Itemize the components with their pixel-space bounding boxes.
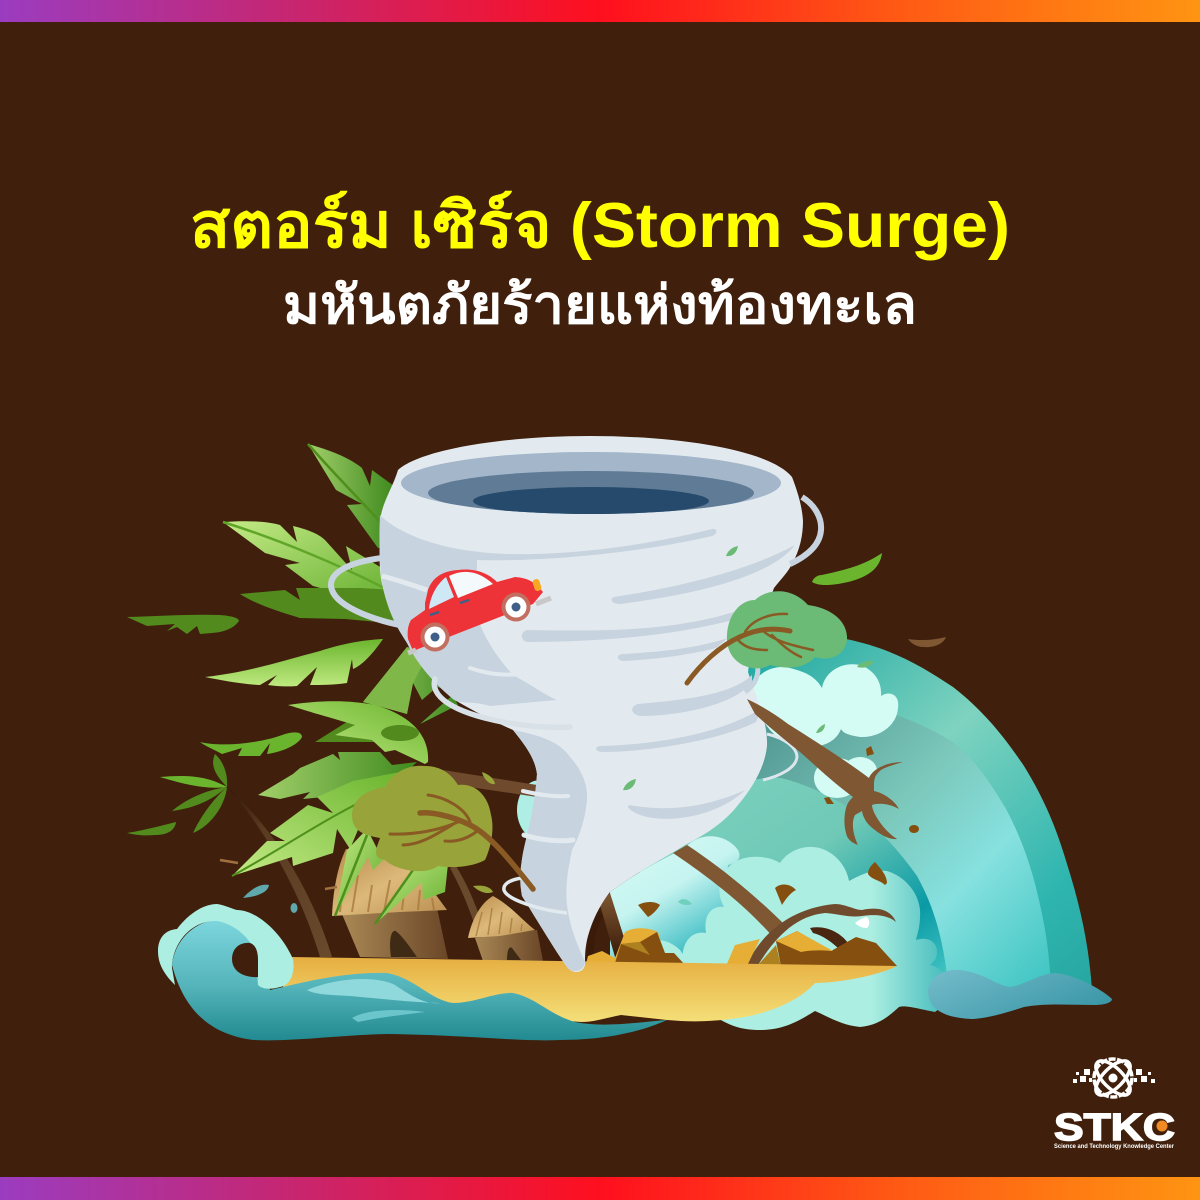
car door handles — [430, 600, 469, 615]
wave highlight lower — [352, 1010, 425, 1022]
olive tree branches — [390, 795, 533, 889]
palm trunk: left — [227, 787, 332, 957]
tree trunk: over lower wave — [673, 845, 787, 937]
ring: left — [331, 558, 410, 627]
ring: mid left — [434, 679, 570, 727]
front wave — [158, 904, 667, 1040]
car — [408, 570, 551, 653]
olive tree branch behind tornado — [443, 770, 537, 797]
ring: lower — [504, 878, 567, 913]
body shadow lower twist — [513, 730, 587, 971]
wave sea body — [172, 920, 667, 1040]
top gradient bar — [0, 0, 1200, 22]
wave foam: rocks backing puff — [640, 940, 690, 965]
sand beach — [280, 957, 897, 1022]
leaf: top — [308, 444, 394, 548]
light stripe on shadow — [382, 576, 427, 590]
tree trunk: near tornado base — [587, 893, 627, 957]
debris chips and small leaves — [473, 546, 919, 928]
body shadow upper left — [379, 515, 716, 706]
wave curl opening — [232, 943, 258, 977]
tornado inner rim — [401, 452, 781, 514]
leaf: far left — [127, 615, 239, 634]
leaf: mid gradient — [258, 752, 417, 799]
ring: upper right — [790, 497, 821, 564]
leaf: dark mid — [240, 588, 400, 624]
wave highlight — [307, 979, 440, 1003]
light stripes on lower twist — [523, 791, 573, 841]
car windows — [429, 577, 454, 609]
tornado — [379, 436, 803, 972]
leaf: long bright — [205, 639, 383, 686]
wave foam: teal patch behind tornado — [517, 780, 563, 840]
title: Storm Surge: สตอร์ม เซิร์จ (Storm Surge) — [190, 190, 1010, 261]
light stripe on shadow 2 — [470, 668, 520, 675]
right swell blob — [928, 970, 1112, 1019]
wave foam: upper cloud — [752, 664, 898, 747]
flying debris brown — [908, 637, 946, 647]
small palm fronds — [127, 754, 227, 835]
green tree crown — [687, 591, 847, 683]
bottom gradient bar — [0, 1177, 1200, 1200]
logo atom core — [1108, 1074, 1118, 1082]
rocks on the beach — [585, 928, 897, 968]
leaf: right of centre under tornado — [363, 647, 425, 714]
logo: STKC — [1054, 1055, 1175, 1150]
olive tree crown — [352, 766, 533, 889]
logo atom emblem — [1090, 1055, 1136, 1101]
logo orange dot — [1156, 1120, 1168, 1132]
leaf: upper left — [223, 521, 400, 610]
hut: large — [332, 849, 448, 959]
curved palm twigs and water drops — [220, 860, 337, 913]
palm leaves over large hut — [335, 829, 448, 924]
broken tree with roots on wave — [747, 699, 903, 845]
leaf: large low — [232, 772, 400, 876]
logo left pixels — [1073, 1069, 1092, 1083]
wave foam: lower cloud — [682, 847, 951, 1030]
hut: small — [468, 896, 543, 961]
tornado body — [380, 436, 803, 972]
curved fallen branches — [747, 904, 896, 965]
car wheels — [420, 622, 450, 652]
leaf: centre behind car — [363, 647, 458, 724]
wave curl foam — [158, 904, 294, 989]
logo right pixels — [1134, 1069, 1155, 1083]
tornado throat — [428, 471, 754, 515]
palm trunk: centre — [450, 866, 486, 935]
logo wordmark: STKC — [1054, 1107, 1175, 1149]
ring: streak to crown — [745, 662, 758, 692]
logo tagline: Science and Technology Knowledge Center — [1054, 1144, 1175, 1150]
wave foam: small puff — [814, 757, 877, 798]
flying leaf — [812, 553, 882, 585]
palm leaves, back group — [127, 444, 458, 876]
illustration: giant wave behind tornado — [640, 638, 1092, 1000]
car bumpers — [536, 598, 551, 604]
green tree branches — [687, 614, 813, 683]
leaf: curled — [288, 701, 428, 764]
leaf: small bright — [200, 732, 302, 756]
subtitle: มหันตภัยร้ายแห่งท้องทะเล — [283, 276, 917, 335]
tornado streaks — [522, 545, 795, 819]
wave foam: pale cloud by tornado — [610, 836, 740, 965]
ring: mid right — [763, 734, 797, 780]
car lamp — [532, 578, 542, 592]
